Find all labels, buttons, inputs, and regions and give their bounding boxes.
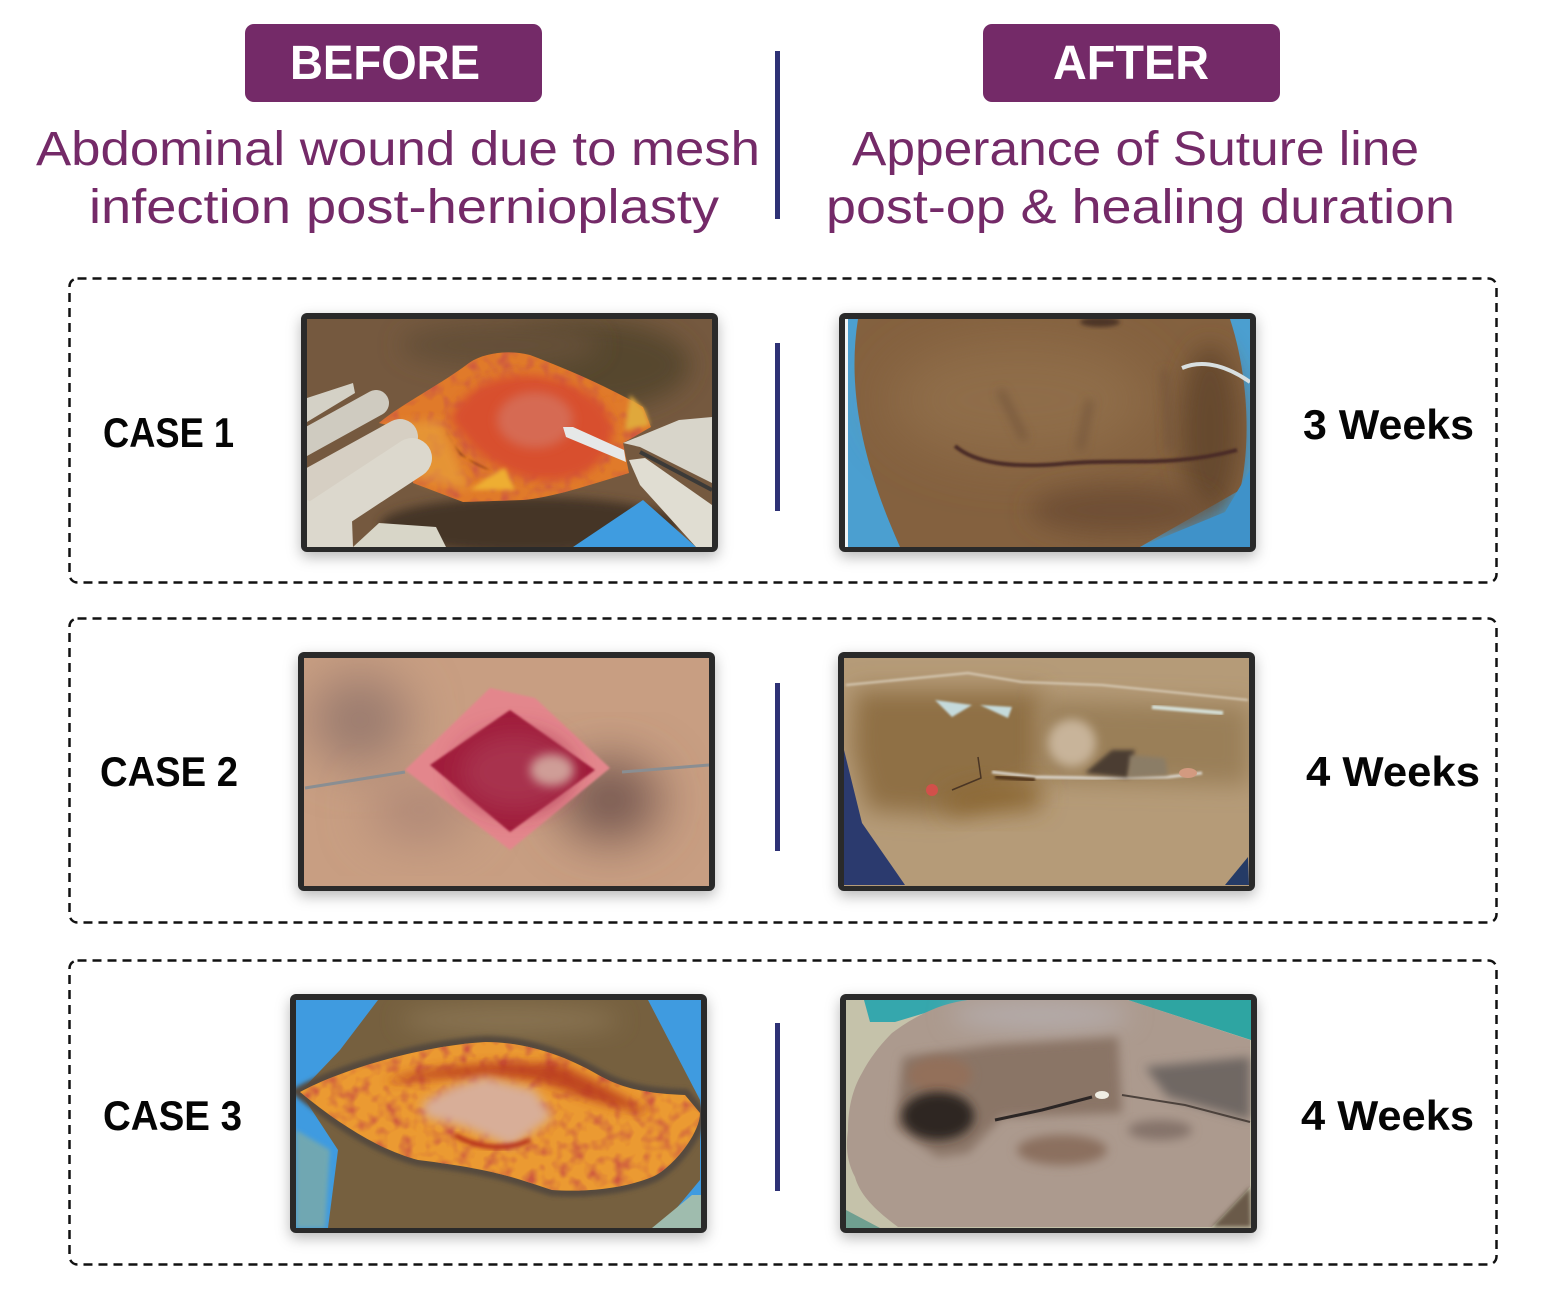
case 3 label: CASE 3 — [103, 1092, 242, 1139]
before subtitle: Abdominal wound due to mesh — [36, 123, 760, 176]
case 2 after photo — [838, 652, 1255, 891]
BEFORE badge — [245, 24, 542, 102]
case 2 divider — [775, 683, 780, 851]
case 1 divider — [775, 343, 780, 511]
case 2 label: CASE 2 — [100, 748, 238, 795]
case 1 label: CASE 1 — [103, 409, 234, 456]
case 2 before photo — [298, 652, 715, 891]
case 1 after photo — [839, 313, 1256, 552]
BEFORE badge: BEFORE — [290, 37, 480, 90]
case 2 duration: 4 Weeks — [1306, 748, 1480, 795]
case 1 duration: 3 Weeks — [1303, 401, 1474, 448]
case 3 divider — [775, 1023, 780, 1191]
before subtitle: infection post-hernioplasty — [89, 181, 719, 234]
AFTER badge: AFTER — [1053, 37, 1209, 90]
case 3 after photo — [840, 994, 1257, 1233]
panel: case 2 — [70, 618, 1496, 922]
case 3 duration: 4 Weeks — [1301, 1092, 1474, 1139]
after subtitle: Apperance of Suture line — [852, 123, 1419, 176]
case 3 before photo — [290, 994, 707, 1233]
before subtitle — [36, 123, 760, 234]
after subtitle: post-op & healing duration — [826, 181, 1455, 234]
header divider — [775, 51, 780, 219]
panel: case 3 — [70, 960, 1496, 1264]
AFTER badge — [983, 24, 1280, 102]
case 1 before photo — [295, 313, 718, 553]
panel: case 1 — [70, 278, 1496, 582]
after subtitle — [826, 123, 1455, 234]
